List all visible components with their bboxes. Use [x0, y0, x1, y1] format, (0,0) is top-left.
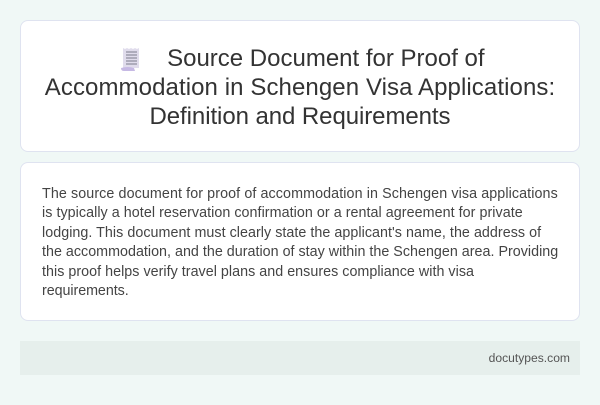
- text block: description: the accommodation, and the duration of stay within the Schengen area. Providing: [42, 244, 558, 260]
- text block: description: is typically a hotel reservation confirmation or a rental agreement for private: [42, 205, 523, 221]
- title: Accommodation in Schengen Visa Applications:: [45, 74, 555, 101]
- panel: title card: [20, 20, 580, 152]
- title: [44, 45, 555, 130]
- text block: description: requirements.: [42, 283, 129, 299]
- text block: description: [42, 186, 558, 299]
- text block: description: lodging. This document must clearly state the applicant's name, the address of: [42, 225, 541, 241]
- icon: document: [121, 48, 139, 71]
- footer bar: [20, 341, 580, 375]
- title: Definition and Requirements: [150, 103, 450, 130]
- text block: description: this proof helps verify travel plans and ensures compliance with visa: [42, 264, 474, 280]
- title: Source Document for Proof of: [167, 45, 485, 72]
- panel: description card: [20, 162, 580, 321]
- footer text: docutypes.com: [489, 351, 570, 365]
- text block: description: The source document for proof of accommodation in Schengen visa applications: [42, 186, 558, 202]
